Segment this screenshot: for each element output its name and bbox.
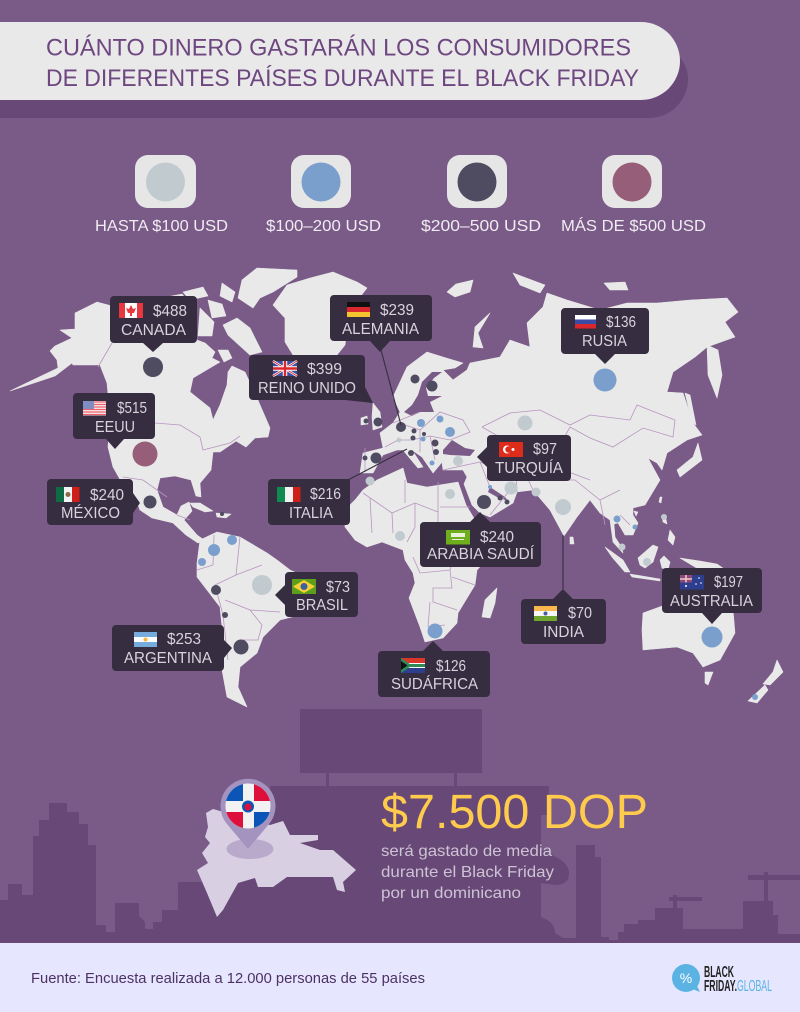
label: Brasil: $73 xyxy=(326,579,350,596)
label: India: $70 xyxy=(568,605,592,622)
legend item: 200-500: $200–500 USD xyxy=(421,218,541,235)
legend item: mas de 500 xyxy=(561,155,706,235)
label: Turquia: $97 xyxy=(533,441,557,458)
label: Australia: $197 xyxy=(714,574,743,591)
label: Arabia Saudi: ARABIA SAUDÍ xyxy=(427,546,535,563)
legend item: 100-200: $100–200 USD xyxy=(266,218,381,235)
label: India xyxy=(521,589,606,644)
logo: FRIDAY. xyxy=(704,978,737,995)
label: Rusia: RUSIA xyxy=(582,333,628,350)
legend item: hasta 100: HASTA $100 USD xyxy=(95,218,228,235)
dominican republic map xyxy=(197,779,356,917)
label: Reino Unido xyxy=(249,355,373,403)
legend item: mas de 500: MÁS DE $500 USD xyxy=(561,216,706,235)
logo xyxy=(672,964,772,995)
label: EEUU xyxy=(73,393,155,449)
big amount: $7.500 DOP xyxy=(381,786,648,839)
legend item: hasta 100 xyxy=(95,155,228,235)
label: Argentina: $253 xyxy=(167,631,201,648)
label: Mexico: $240 xyxy=(90,487,124,504)
label: Turquia xyxy=(477,435,571,481)
logo: % xyxy=(680,970,692,986)
legend xyxy=(95,155,706,235)
label: Australia xyxy=(662,568,762,624)
amount description: por un dominicano xyxy=(381,885,521,902)
data circles blue xyxy=(198,368,758,700)
legend item: 100-200 xyxy=(266,155,381,235)
label: Brasil: BRASIL xyxy=(296,597,348,614)
footer xyxy=(0,943,800,1012)
title: CUÁNTO DINERO GASTARÁN LOS CONSUMIDORES xyxy=(46,34,631,62)
label: EEUU: $515 xyxy=(117,400,147,417)
islands europe asia xyxy=(361,273,740,618)
skyline background xyxy=(0,709,800,943)
source: Fuente: Encuesta realizada a 12.000 personas de 55 países xyxy=(31,971,425,987)
eurasia xyxy=(360,293,738,553)
label: Brasil xyxy=(275,572,358,617)
label: Mexico: MÉXICO xyxy=(61,505,120,522)
label: Sudafrica xyxy=(378,641,490,697)
legend item: 200-500 xyxy=(421,155,541,235)
label: EEUU: EEUU xyxy=(95,419,135,436)
label: Australia: AUSTRALIA xyxy=(670,593,754,610)
label: Italia xyxy=(268,479,350,525)
label: Alemania xyxy=(330,295,432,352)
land masses xyxy=(10,268,783,707)
tasmania and new zealand xyxy=(705,660,783,703)
label: Canada: $488 xyxy=(153,303,187,320)
country borders xyxy=(98,343,675,660)
title xyxy=(46,34,639,92)
africa xyxy=(345,468,505,642)
label: Italia: ITALIA xyxy=(289,505,334,522)
label: Argentina xyxy=(112,625,232,671)
label: Rusia: $136 xyxy=(606,314,636,331)
world map xyxy=(10,268,783,707)
header banner xyxy=(0,22,688,118)
data circle maroon usa xyxy=(132,442,158,466)
label: Arabia Saudi xyxy=(420,512,541,567)
data circles dark xyxy=(143,357,510,654)
label: Sudafrica: $126 xyxy=(436,658,466,675)
logo: GLOBAL xyxy=(737,978,772,995)
data circles light xyxy=(252,416,667,595)
greenland xyxy=(273,272,367,355)
inland seas xyxy=(404,372,508,501)
south america xyxy=(197,532,335,707)
label: Reino Unido: REINO UNIDO xyxy=(258,380,356,397)
label: Reino Unido: $399 xyxy=(307,361,342,378)
leader lines xyxy=(348,350,563,589)
label: India: INDIA xyxy=(543,624,585,641)
label: Argentina: ARGENTINA xyxy=(124,650,213,667)
north america xyxy=(10,294,270,543)
billboard xyxy=(300,709,482,786)
label: Italia: $216 xyxy=(310,486,341,503)
label: Sudafrica: SUDÁFRICA xyxy=(391,676,479,693)
label: Canada: CANADA xyxy=(121,322,187,339)
amount description xyxy=(381,843,554,902)
title: DE DIFERENTES PAÍSES DURANTE EL BLACK FRIDAY xyxy=(46,65,639,92)
label: Turquia: TURQUÍA xyxy=(495,460,564,477)
label: Rusia xyxy=(561,308,649,364)
label: Canada xyxy=(110,296,197,352)
australia xyxy=(642,600,735,667)
map pin with flag xyxy=(220,779,276,859)
label: Arabia Saudi: $240 xyxy=(480,529,514,546)
amount description: será gastado de media xyxy=(381,843,552,860)
label: Mexico xyxy=(47,479,140,525)
label: Alemania: $239 xyxy=(380,302,414,319)
amount description: durante el Black Friday xyxy=(381,864,554,881)
arctic islands xyxy=(183,268,297,518)
label: Alemania: ALEMANIA xyxy=(342,321,420,338)
logo: BLACK xyxy=(704,964,734,981)
